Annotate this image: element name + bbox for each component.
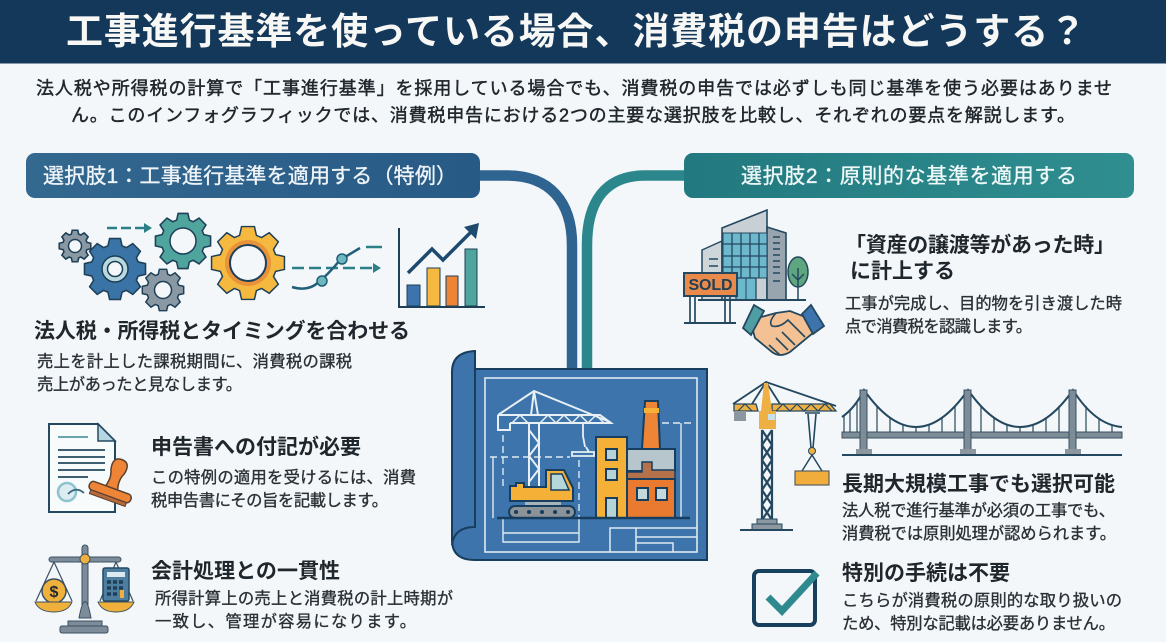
text: accounting consistency: 会計処理との一貫性 <box>151 560 340 583</box>
icon: checkbox <box>754 571 817 625</box>
text: no special procedure: 特別の手続は不要 <box>842 562 1010 585</box>
blueprint buildings <box>497 401 690 518</box>
blueprint excavator <box>509 470 575 518</box>
text: no special procedure: ため、特別な記載は必要ありません。 <box>842 615 1115 633</box>
text: accounting consistency: 一致し、管理が容易になります。 <box>155 613 416 631</box>
text: recognise at transfer <box>845 233 1122 336</box>
text: match timing: 法人税・所得税とタイミングを合わせる <box>34 319 410 343</box>
heading: option 1 <box>26 153 480 198</box>
text: recognise at transfer: 点で消費税を認識します。 <box>845 318 1032 336</box>
intro text: ん。このインフォグラフィックでは、消費税申告における2つの主要な選択肢を比較し、それぞれの要点を解説します。 <box>71 106 1075 126</box>
handshake <box>743 305 824 355</box>
icon: tower crane <box>733 382 836 530</box>
text: recognise at transfer: に計上する <box>850 260 955 283</box>
icon: document and stamp <box>49 424 143 512</box>
text: recognise at transfer: 「資産の譲渡等があった時」 <box>845 233 1115 257</box>
icon: scales with coin and calculator: $ <box>50 584 59 601</box>
icon: suspension bridge <box>842 390 1122 455</box>
icon: scales with coin and calculator <box>35 545 134 633</box>
text: filing note: 税申告書にその旨を記載します。 <box>151 492 388 510</box>
text: match timing: 売上があったと見なします。 <box>37 376 242 394</box>
text: long-term large projects: 長期大規模工事でも選択可能 <box>842 472 1115 496</box>
title banner <box>0 0 1166 64</box>
icon: sold building and handshake: SOLD <box>688 277 732 294</box>
text: filing note <box>151 435 416 510</box>
blueprint illustration <box>452 351 707 560</box>
heading: option 1: 選択肢1：工事進行基準を適用する（特例） <box>43 165 457 188</box>
text: no special procedure <box>842 562 1122 633</box>
heading: option 2: 選択肢2：原則的な基準を適用する <box>741 165 1077 188</box>
text: long-term large projects <box>842 472 1116 543</box>
connector: option 1 to blueprint <box>478 176 572 372</box>
text: no special procedure: こちらが消費税の原則的な取り扱いの <box>842 592 1122 610</box>
heading: option 2 <box>684 153 1134 198</box>
intro text: 法人税や所得税の計算で「工事進行基準」を採用している場合でも、消費税の申告では必ずしも同じ基準を使う必要はありませ <box>36 78 1112 98</box>
intro text <box>36 78 1112 126</box>
text: accounting consistency <box>151 560 453 631</box>
text: accounting consistency: 所得計算上の売上と消費税の計上時期が <box>155 589 453 608</box>
text: long-term large projects: 消費税では原則処理が認められます。 <box>842 525 1116 543</box>
icon: gears and timing <box>59 213 382 311</box>
blueprint crane <box>498 391 611 486</box>
icon: sold building and handshake <box>684 210 824 355</box>
title banner: 工事進行基準を使っている場合、消費税の申告はどうする？ <box>66 11 1086 52</box>
text: filing note: 申告書への付記が必要 <box>151 435 361 459</box>
text: recognise at transfer: 工事が完成し、目的物を引き渡した時 <box>845 295 1122 313</box>
text: match timing <box>34 319 410 394</box>
text: match timing: 売上を計上した課税期間に、消費税の課税 <box>37 353 352 371</box>
text: long-term large projects: 法人税で進行基準が必須の工事でも、 <box>842 502 1115 520</box>
icon: growth chart <box>399 223 485 307</box>
text: filing note: この特例の適用を受けるには、消費 <box>151 469 416 487</box>
connector: option 2 to blueprint <box>587 176 686 372</box>
